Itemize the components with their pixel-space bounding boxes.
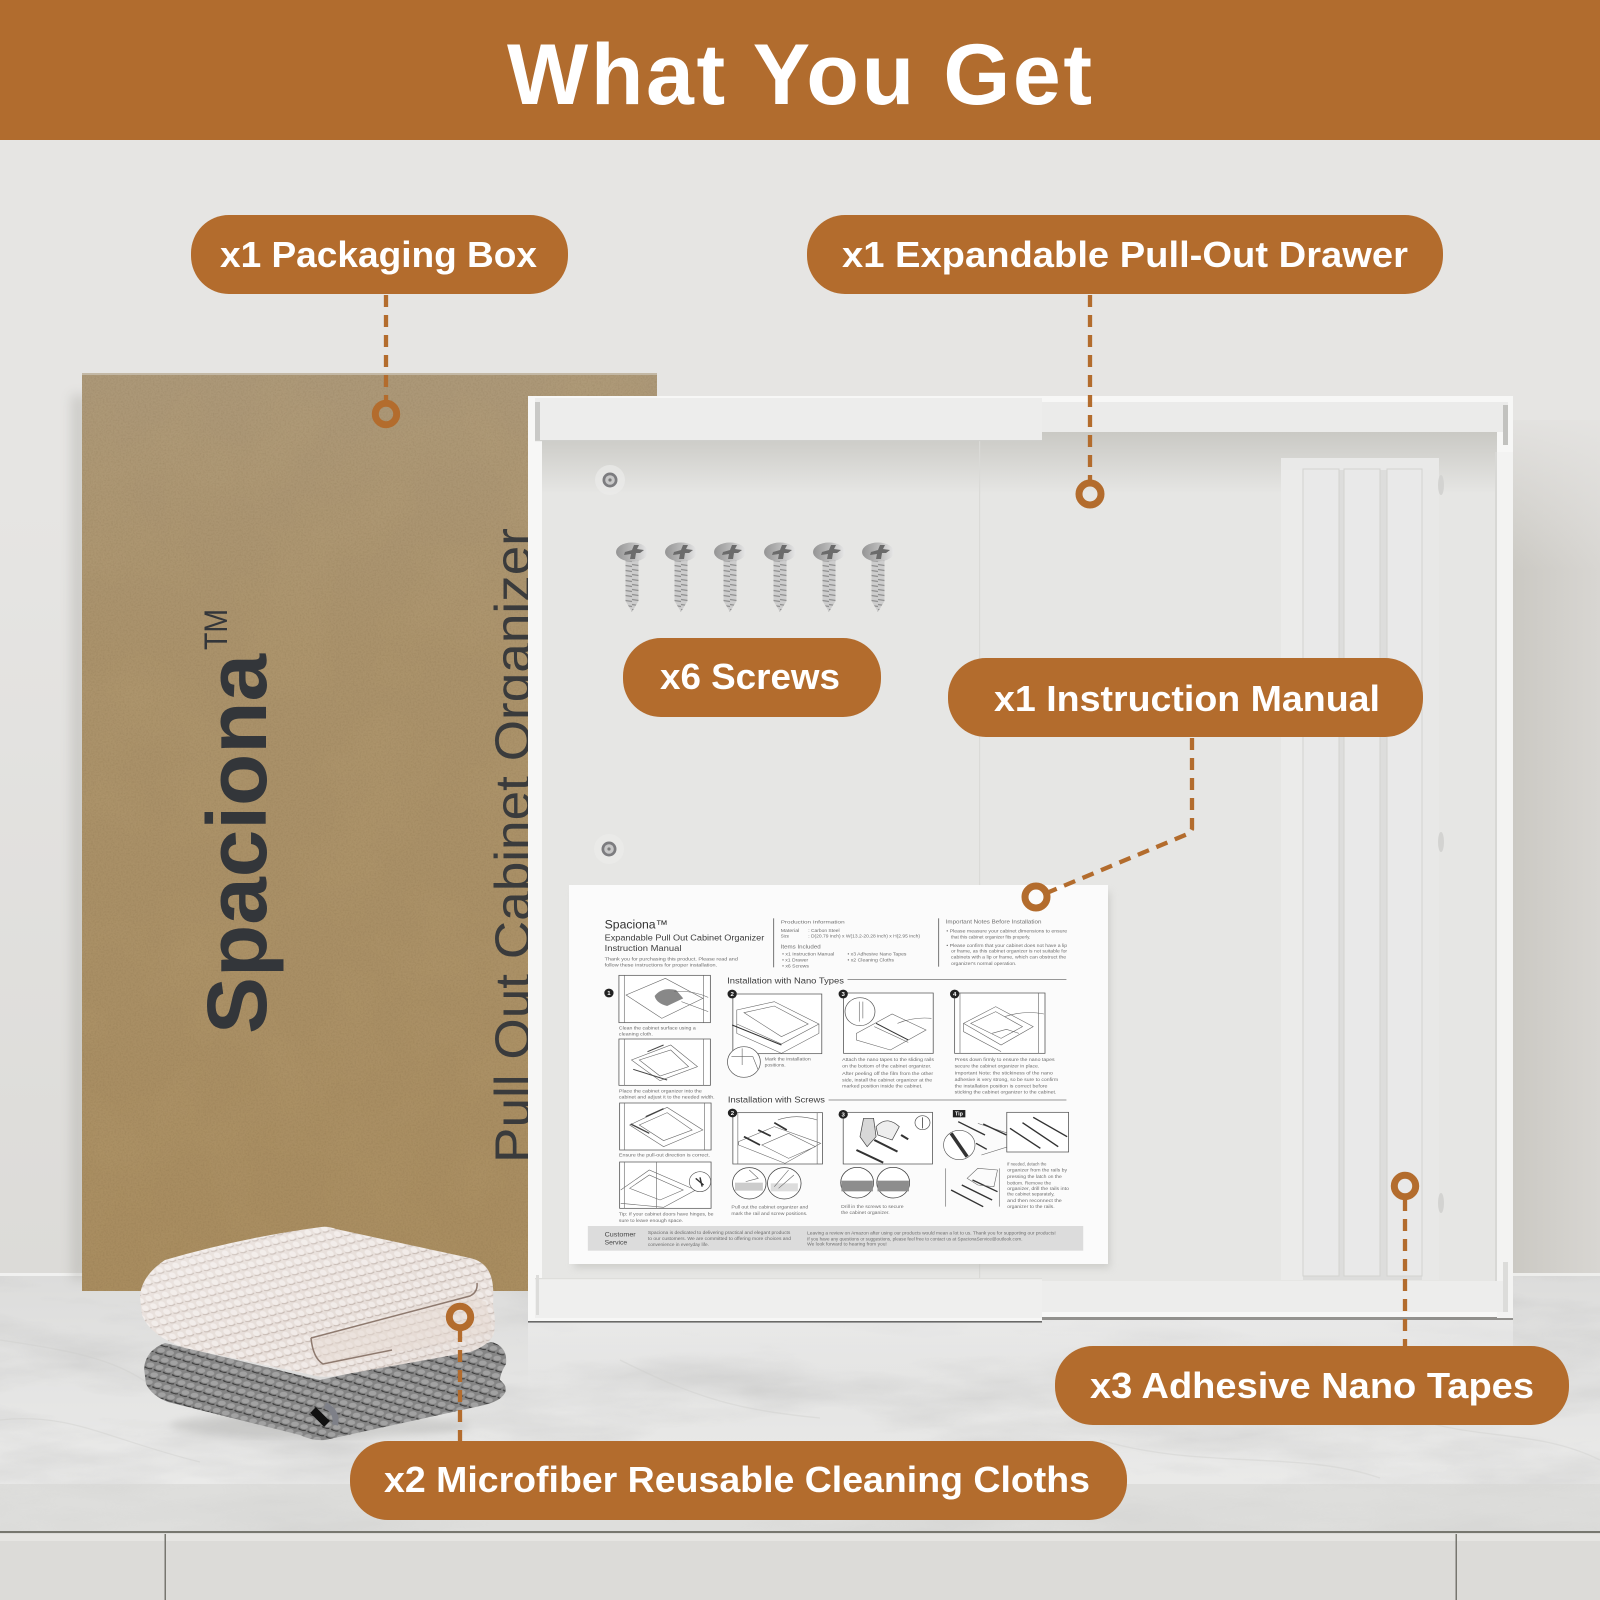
manual customer service band: Customer — [605, 1232, 637, 1239]
manual left column steps: cabinet and adjust it to the needed width. — [619, 1094, 715, 1100]
connector: packaging box — [375, 295, 397, 425]
box product name: Pull Out Cabinet Organizer — [485, 528, 541, 1163]
expandable drawer — [528, 396, 1513, 1323]
title banner — [0, 0, 1600, 140]
manual tip block: Tip — [955, 1112, 963, 1118]
wall background — [0, 140, 1600, 1280]
manual screw steps — [728, 1109, 932, 1217]
marble countertop — [0, 1273, 1600, 1533]
manual nano tape steps: marked position inside the cabinet. — [842, 1083, 922, 1089]
label: packaging box: x1 Packaging Box — [220, 234, 537, 275]
manual section headings — [727, 976, 1066, 1104]
manual nano tape steps: Mark the installation — [765, 1057, 811, 1063]
manual left column steps: cleaning cloth. — [619, 1031, 653, 1037]
label: cleaning cloths — [350, 1441, 1127, 1520]
manual customer service band: to our customers. We are committed to offering more choices and — [648, 1236, 792, 1241]
drawer shadow on counter — [1042, 1317, 1513, 1320]
manual product info: Size — [781, 934, 790, 940]
tape 1 — [1303, 469, 1339, 1276]
manual product info: • x2 Cleaning Cloths — [847, 957, 895, 963]
box face — [82, 375, 657, 1291]
manual tip block: bottom. Remove the — [1007, 1180, 1051, 1186]
manual left column steps — [604, 975, 715, 1224]
manual nano tape steps: the installation position is correct before — [955, 1083, 1048, 1089]
manual nano tape steps: 4 — [953, 992, 957, 998]
manual shadow — [574, 892, 1110, 1268]
microfiber cleaning cloths — [140, 1227, 506, 1440]
manual left column steps: Place the cabinet organizer into the — [619, 1088, 702, 1094]
bottom rail — [1042, 1281, 1505, 1312]
manual important notes — [938, 918, 1068, 967]
manual title block: Expandable Pull Out Cabinet Organizer — [605, 933, 764, 943]
manual title block: Instruction Manual — [605, 943, 681, 953]
manual nano tape steps: side, install the cabinet organizer at the — [842, 1077, 932, 1083]
cabinet fronts — [0, 1531, 1600, 1600]
manual product info: • x3 Adhesive Nano Tapes — [847, 951, 907, 957]
tape 2 — [1344, 469, 1380, 1276]
drawer interior — [542, 432, 1497, 1282]
connector: drawer — [1079, 295, 1101, 505]
manual nano tape steps: Attach the nano tapes to the sliding rails — [842, 1057, 935, 1063]
label: screws — [623, 638, 881, 717]
tape 3 — [1387, 469, 1422, 1276]
white cloth — [140, 1227, 495, 1377]
box brand text: Spaciona — [190, 653, 284, 1034]
connector: instruction manual — [1025, 738, 1192, 908]
label: pull-out drawer — [807, 215, 1443, 294]
manual nano tape steps: positions. — [765, 1063, 786, 1069]
manual screw steps: the cabinet organizer. — [841, 1210, 890, 1216]
manual tip block: organizer from the rails by — [1007, 1168, 1068, 1174]
manual product info: • x1 Drawer — [782, 957, 809, 963]
manual tip block: pressing the latch on the — [1007, 1174, 1062, 1180]
manual customer service band: Leaving a review on Amazon after using our products would mean a lot to us. Thank you for supporting our products! — [807, 1230, 1056, 1235]
manual screw steps: mark the rail and screw positions. — [731, 1211, 807, 1217]
label: pull-out drawer: x1 Expandable Pull-Out Drawer — [842, 234, 1408, 275]
manual left column steps: sure to leave enough space. — [619, 1218, 683, 1224]
manual product info: Production Information — [781, 920, 845, 926]
mounting bolt top — [595, 465, 625, 495]
manual important notes: organizer's normal operation. — [951, 961, 1016, 967]
manual screw steps: Pull out the cabinet organizer and — [731, 1205, 809, 1211]
manual customer service band: If you have any questions or suggestions, please feel free to contact us at SpacionaService@outlook.com. — [807, 1236, 1022, 1241]
box cast shadow — [72, 395, 86, 1280]
manual important notes: • Please confirm that your cabinet does not have a lip — [946, 943, 1067, 949]
manual tip block: If needed, detach the — [1007, 1161, 1047, 1167]
manual title block: Thank you for purchasing this product. Please read and — [605, 957, 738, 963]
manual left column steps: Clean the cabinet surface using a — [619, 1025, 696, 1031]
manual screw steps: 2 — [731, 1111, 735, 1117]
manual important notes: or frame, as this cabinet organizer is not suitable for — [951, 948, 1068, 954]
label: nano tapes — [1055, 1346, 1569, 1425]
packaging box — [72, 373, 657, 1291]
manual tip block: the cabinet separately, — [1007, 1192, 1055, 1198]
manual tip block — [944, 1110, 1069, 1210]
instruction manual — [569, 885, 1110, 1268]
manual left column steps: Tip: If your cabinet doors have hinges, be — [619, 1212, 714, 1218]
manual customer service band: Service — [605, 1240, 627, 1247]
manual left column steps: 1 — [607, 991, 611, 997]
manual title block — [605, 918, 764, 969]
manual nano tape steps: After peeling off the film from the other — [842, 1071, 934, 1077]
label: nano tapes: x3 Adhesive Nano Tapes — [1090, 1365, 1534, 1406]
manual nano tape steps: on the bottom of the cabinet organizer. — [842, 1063, 931, 1069]
manual important notes: • Please measure your cabinet dimensions to ensure — [946, 928, 1067, 934]
manual title block: follow these instructions for proper installation. — [605, 963, 717, 969]
white cloth fold flap — [311, 1292, 492, 1366]
manual section headings: Installation with Nano Types — [727, 976, 844, 985]
title text: What You Get — [507, 27, 1092, 123]
label: packaging box — [191, 215, 568, 294]
adhesive nano tapes — [1281, 458, 1444, 1280]
manual nano tape steps: Press down firmly to ensure the nano tapes — [955, 1057, 1055, 1063]
manual tip block: organizer to the rails. — [1007, 1204, 1055, 1210]
label: screws: x6 Screws — [660, 656, 840, 697]
manual customer service band: We look forward to hearing from you! — [807, 1242, 887, 1247]
manual nano tape steps: 2 — [730, 992, 735, 998]
manual important notes: Important Notes Before Installation — [946, 919, 1041, 925]
manual section headings: Installation with Screws — [728, 1095, 826, 1104]
manual important notes: that this cabinet organizer fits properly. — [951, 934, 1030, 940]
cloth contact shadow — [170, 1414, 470, 1438]
manual screw steps: 3 — [842, 1112, 846, 1118]
manual customer service band: Spaciona is dedicated to delivering practical and elegant products — [648, 1230, 791, 1235]
manual customer service band — [588, 1226, 1083, 1251]
manual tip block: and then reconnect the — [1007, 1198, 1062, 1204]
connector: nano tapes — [1394, 1175, 1416, 1346]
six screws — [616, 542, 894, 612]
manual tip block: organizer, drill the rails into — [1007, 1186, 1069, 1192]
manual nano tape steps: sticking the cabinet organizer to the cabinet. — [955, 1089, 1056, 1095]
manual title block: Spaciona™ — [605, 918, 668, 931]
manual product info: : Carbon Steel — [808, 928, 840, 934]
manual nano tape steps — [727, 990, 1058, 1095]
label: instruction manual — [948, 658, 1423, 737]
manual customer service band: convenience in everyday life. — [648, 1242, 709, 1247]
label: instruction manual: x1 Instruction Manual — [994, 678, 1380, 719]
manual product info: • x1 Instruction Manual — [782, 951, 834, 957]
mounting bolt bottom — [594, 834, 624, 864]
top rail — [1042, 402, 1508, 432]
label: cleaning cloths: x2 Microfiber Reusable Cleaning Cloths — [384, 1459, 1090, 1500]
manual print content — [588, 918, 1083, 1251]
gray cloth — [144, 1342, 506, 1440]
manual product info: Items Included — [781, 944, 821, 950]
manual product info — [773, 918, 920, 969]
manual left column steps: Ensure the pull-out direction is correct. — [619, 1153, 710, 1159]
manual nano tape steps: adhesive is very strong, so be sure to confirm — [955, 1077, 1058, 1083]
manual nano tape steps: Important Note: the stickiness of the nano — [955, 1071, 1053, 1077]
manual product info: Material — [781, 928, 799, 934]
manual nano tape steps: 3 — [842, 992, 846, 998]
connector: cleaning cloths — [449, 1306, 471, 1441]
manual important notes: cabinets with a lip or frame, which can obstruct the — [951, 954, 1066, 960]
manual sheet — [569, 885, 1108, 1264]
manual product info: : D(20.79 inch) x W(13.2-20.28 inch) x H(2.95 inch) — [808, 934, 920, 940]
manual nano tape steps: secure the cabinet organizer in place. — [955, 1064, 1039, 1070]
white cloth fold seam — [311, 1283, 477, 1364]
manual screw steps: Drill in the screws to secure — [841, 1204, 904, 1210]
box trademark: TM — [198, 609, 234, 650]
drawer body — [528, 396, 1513, 1317]
manual product info: • x6 Screws — [782, 963, 810, 969]
